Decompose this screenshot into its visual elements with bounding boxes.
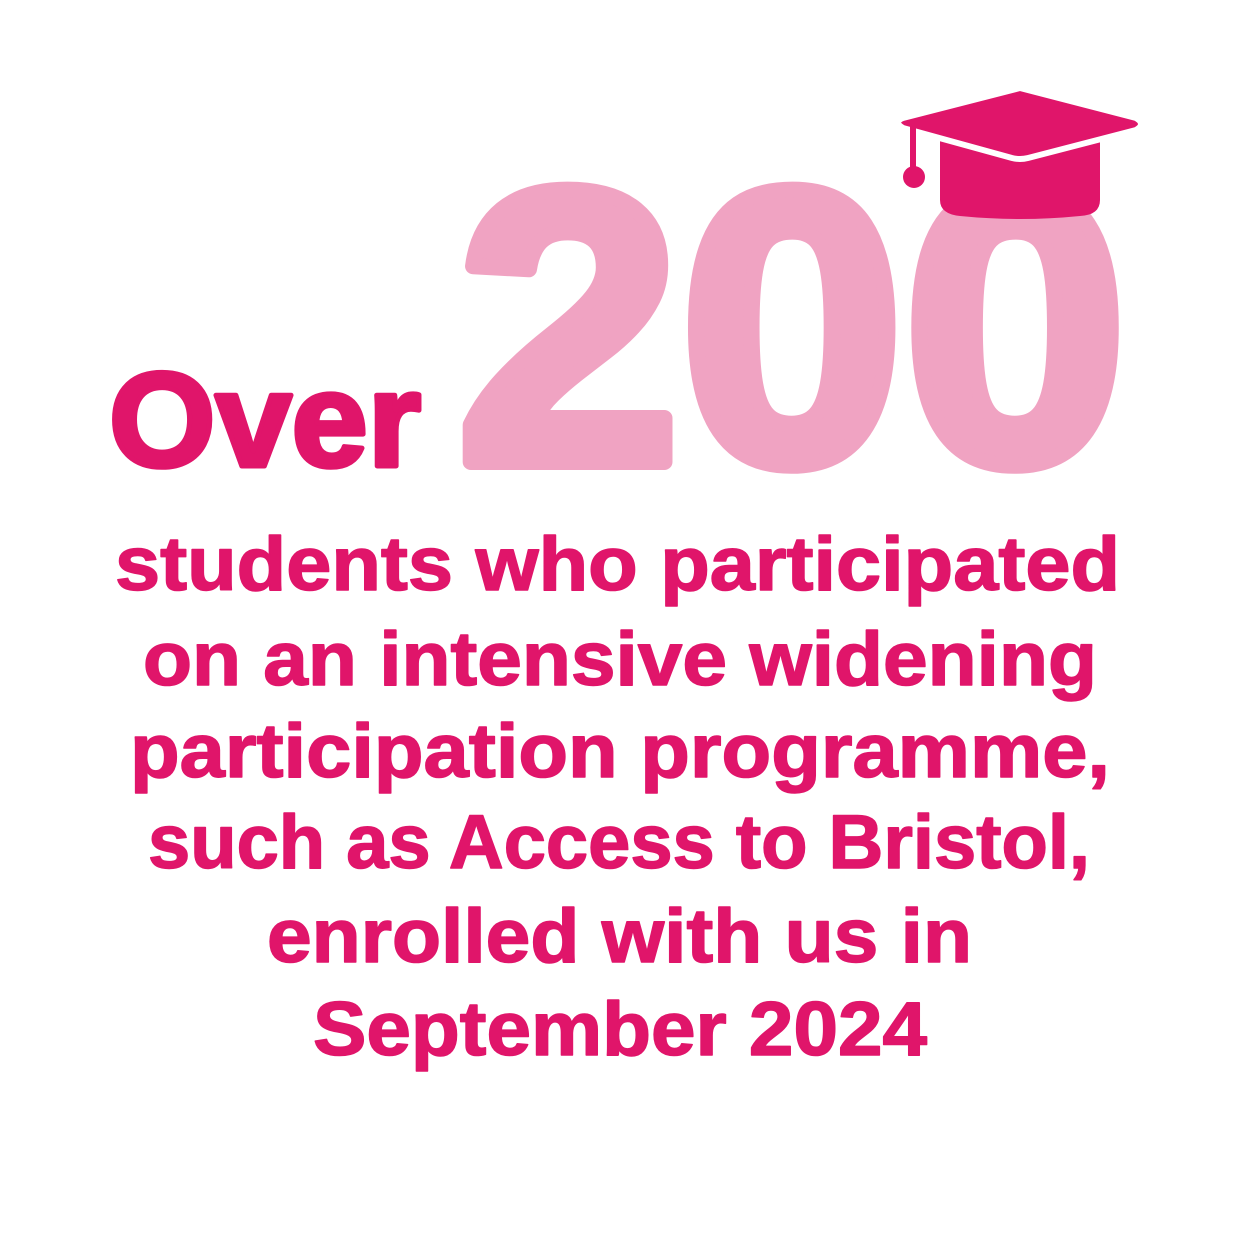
description text (115, 522, 1120, 1072)
word Over: Over (109, 346, 421, 495)
description text: enrolled with us in (267, 894, 972, 979)
icon: graduation cap (898, 88, 1141, 219)
description text: on an intensive widening (143, 617, 1097, 702)
description text: students who participated (115, 522, 1120, 607)
description text: such as Access to Bristol, (148, 800, 1090, 885)
big number 200: 200 (457, 109, 1127, 545)
description text: September 2024 (313, 987, 927, 1072)
description text: participation programme, (130, 709, 1110, 794)
